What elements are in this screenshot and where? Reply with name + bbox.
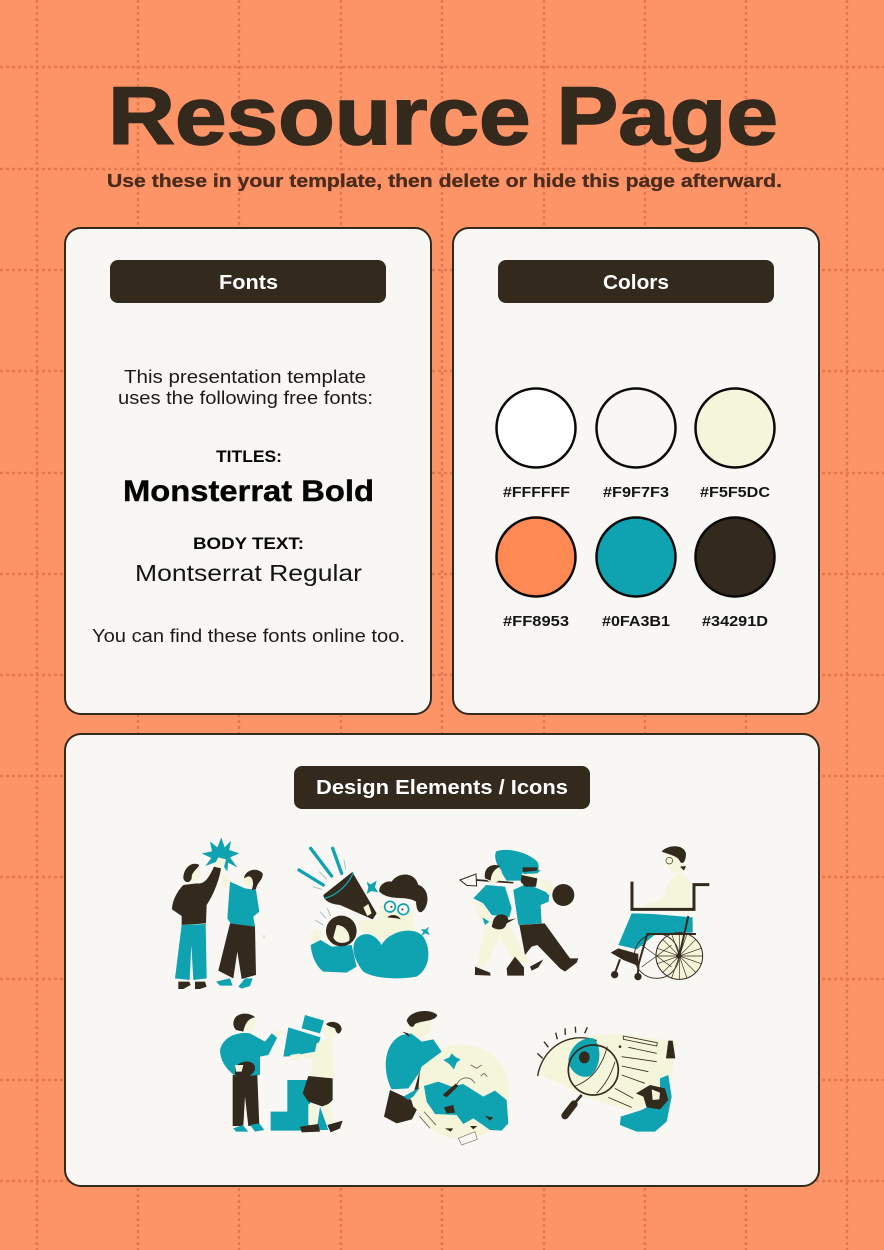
panel: fonts [65,228,431,714]
swatch white [496,388,576,501]
body font [135,534,362,586]
icon: wheelchair user [611,846,709,980]
titles font: TITLES: [216,447,282,466]
icon: gardener with plants [384,1011,510,1145]
icon: high five [172,837,266,989]
intro text [118,367,373,408]
heading: design elements: Design Elements / Icons [316,777,568,799]
heading: colors: Colors [603,272,669,294]
panel: design elements [65,734,819,1186]
swatch dark: #34291D [702,614,768,630]
titles font [123,447,374,508]
swatch white: #FFFFFF [503,485,570,501]
subtitle: Use these in your template, then delete or hide this page afterward. [107,170,782,191]
intro text: uses the following free fonts: [118,388,373,408]
swatch dark [696,518,774,630]
swatch beige: #F5F5DC [700,485,771,501]
body font: Montserrat Regular [135,560,362,586]
heading: fonts: Fonts [219,272,278,294]
swatch teal: #0FA3B1 [602,614,670,630]
icon: gardeners [460,850,578,976]
body font: BODY TEXT: [193,534,304,553]
heading: colors [498,260,774,303]
swatch teal [596,518,676,630]
icon: magnifying glass [537,1027,677,1132]
heading: design elements [294,766,590,809]
swatch beige [696,388,774,501]
swatch orange [496,518,576,630]
title: Resource Page [108,71,778,162]
fonts note: You can find these fonts online too. [92,626,405,646]
swatch off-white: #F9F7F3 [603,485,669,501]
swatch off-white [596,388,676,501]
titles font: Monsterrat Bold [123,475,374,508]
panel: colors [453,228,819,714]
swatch orange: #FF8953 [503,614,569,630]
heading: fonts [110,260,386,303]
intro text: This presentation template [124,367,366,387]
icon: megaphone [299,848,430,978]
icon: moving boxes [220,1014,343,1132]
